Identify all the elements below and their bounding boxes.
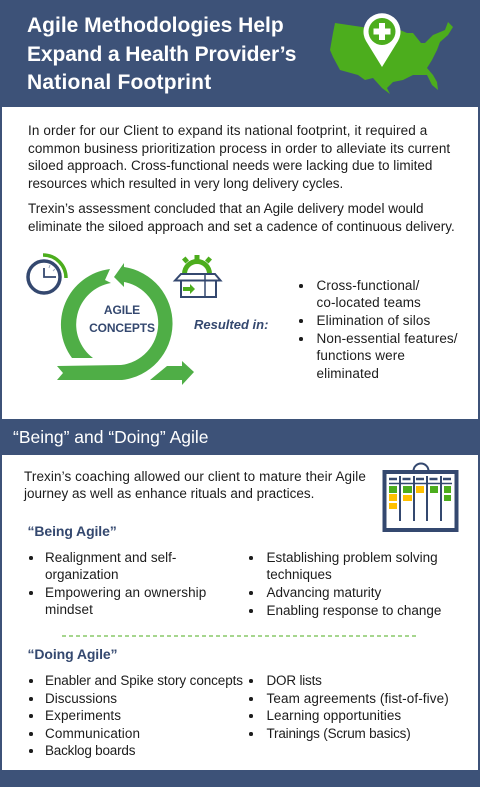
being agile list right: techniques xyxy=(266,567,332,582)
results list: Elimination of silos xyxy=(316,313,430,328)
results list: functions were xyxy=(316,348,405,363)
intro paragraph: siloed approach. Cross-functional needs were lacking due to limited xyxy=(28,158,432,173)
coaching paragraph xyxy=(24,469,366,501)
intro paragraph: In order for our Client to expand its national footprint, it required a xyxy=(28,123,427,138)
side border right xyxy=(478,107,480,770)
coaching paragraph: journey as well as enhance rituals and practices. xyxy=(24,486,314,501)
results list: co-located teams xyxy=(316,295,421,310)
assessment paragraph: Trexin’s assessment concluded that an Agile delivery model would xyxy=(28,201,423,216)
being agile list left xyxy=(29,550,206,617)
being agile list right: Enabling response to change xyxy=(266,603,441,618)
footer band xyxy=(0,770,480,787)
icon: kanban board xyxy=(382,462,458,532)
intro paragraph xyxy=(28,123,450,191)
assessment paragraph: eliminate the siloed approach and set a cadence of continuous delivery. xyxy=(28,219,455,234)
assessment paragraph xyxy=(28,201,455,234)
doing agile list left: Communication xyxy=(45,726,140,741)
icon: US map with location pin xyxy=(330,13,453,94)
section heading band xyxy=(0,419,480,455)
results list xyxy=(299,278,458,381)
icon: clock xyxy=(26,253,68,295)
doing agile list right: DOR lists xyxy=(266,673,322,688)
title: National Footprint xyxy=(27,71,211,94)
being agile list left: mindset xyxy=(45,602,93,617)
resulted in label: Resulted in: xyxy=(194,317,268,332)
doing agile list right: Team agreements (fist-of-five) xyxy=(266,691,449,706)
side border left xyxy=(0,107,2,770)
being agile heading: “Being Agile” xyxy=(28,523,117,539)
icon: box with gear xyxy=(172,255,223,298)
doing agile list left xyxy=(29,673,243,758)
header band xyxy=(0,0,480,107)
section heading: “Being” and “Doing” Agile xyxy=(13,427,209,447)
agile concepts label: AGILE xyxy=(104,303,140,317)
being agile list left: Empowering an ownership xyxy=(45,585,206,600)
intro paragraph: common business prioritization process in order to alleviate its current xyxy=(28,141,450,156)
doing agile list left: Discussions xyxy=(45,691,117,706)
intro paragraph: resources which resulted in very long delivery cycles. xyxy=(28,176,343,191)
coaching paragraph: Trexin’s coaching allowed our client to mature their Agile xyxy=(24,469,366,484)
doing agile list left: Enabler and Spike story concepts xyxy=(45,673,243,688)
being agile list right: Advancing maturity xyxy=(266,585,381,600)
agile concepts loop arrow xyxy=(57,263,194,385)
doing agile list left: Experiments xyxy=(45,708,121,723)
being agile list left: Realignment and self- xyxy=(45,550,176,565)
title: Expand a Health Provider’s xyxy=(27,42,296,66)
doing agile list right: Trainings (Scrum basics) xyxy=(266,726,410,741)
title xyxy=(27,14,296,94)
results list: eliminated xyxy=(316,366,379,381)
doing agile list right xyxy=(249,673,449,741)
results list: Cross-functional/ xyxy=(316,278,420,293)
title: Agile Methodologies Help xyxy=(27,14,284,37)
doing agile list right: Learning opportunities xyxy=(266,708,401,723)
being agile list right: Establishing problem solving xyxy=(266,550,438,565)
doing agile list left: Backlog boards xyxy=(45,743,135,758)
agile concepts label: CONCEPTS xyxy=(89,321,155,335)
being agile list right xyxy=(249,550,441,618)
being agile list left: organization xyxy=(45,567,119,582)
doing agile heading: “Doing Agile” xyxy=(28,646,117,662)
agile concepts label xyxy=(89,303,155,335)
results list: Non-essential features/ xyxy=(316,331,458,346)
